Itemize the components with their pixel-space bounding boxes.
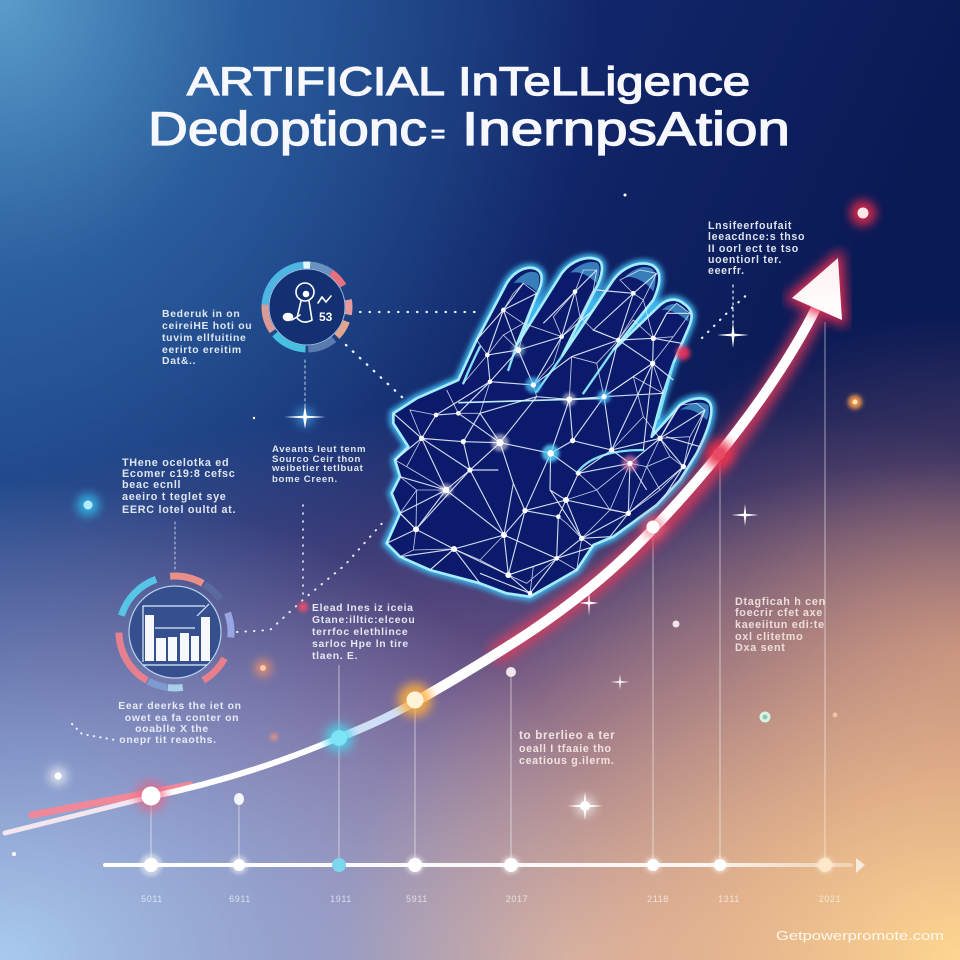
text block G: Dxa sent	[735, 642, 786, 654]
text block D: terrfoc elethlince	[312, 627, 408, 638]
text block H: to brerlieo a ter	[519, 729, 615, 742]
axis year labels	[141, 894, 841, 904]
text block G: foecrir cfet axe	[735, 607, 823, 619]
curve left tail white	[5, 797, 150, 833]
text block A: tuvim ellfuitine	[162, 333, 247, 344]
chart frame	[143, 604, 209, 665]
ring number: 53	[319, 310, 333, 324]
chart bars	[145, 615, 210, 661]
icon: bar chart ring	[98, 555, 252, 709]
text block B: Ecomer c19:8 cefsc	[122, 468, 235, 480]
text block H: oeall I tfaaie tho	[519, 743, 612, 755]
title line 1: ARTIFICIAL	[187, 60, 445, 104]
text block A: Bederuk in on	[162, 309, 240, 320]
axis line	[103, 863, 853, 867]
text block A: ceireiHE hoti ou	[162, 321, 252, 332]
title line 2: Dedoptionc	[148, 102, 427, 155]
growth curve with arrow	[5, 258, 842, 833]
axis year labels: 1911	[330, 894, 352, 904]
text block F	[708, 220, 805, 277]
title line 2: InernpsAtion	[462, 102, 790, 155]
node pink	[136, 781, 166, 811]
dotted connectors	[72, 285, 750, 740]
dense finger mesh	[395, 270, 705, 593]
axis year labels: 2118	[647, 894, 669, 904]
node red	[705, 440, 733, 468]
text block B: aeeiro t teglet sye	[122, 491, 227, 503]
hand glow	[387, 258, 711, 597]
text block B	[122, 457, 236, 516]
text block F: uoentiorl ter.	[708, 254, 782, 266]
text block C: bome Creen.	[272, 474, 338, 485]
text block C: Sourco Ceir thon	[272, 454, 361, 465]
curve lower section	[150, 738, 338, 797]
text block B: EERC lotel oultd at.	[122, 504, 236, 516]
curve red glow	[500, 318, 812, 652]
node amber	[398, 683, 432, 717]
text block G: Dtagficah h cen	[735, 596, 826, 608]
axis year labels: 6911	[229, 894, 251, 904]
text block E: onepr tit reaoths.	[119, 735, 217, 746]
curve middle section	[338, 702, 415, 738]
icon: person ring	[248, 248, 366, 366]
axis year labels: 2021	[819, 894, 841, 904]
hand fill	[387, 258, 711, 597]
text block B: THene ocelotka ed	[122, 457, 229, 469]
wireframe mesh	[387, 270, 705, 593]
stem cap 2	[234, 793, 244, 805]
text block A: Dat&..	[162, 356, 196, 367]
title line 2	[148, 102, 790, 155]
arrow head glow	[792, 258, 842, 320]
text block D: Gtane:illtic:elceou	[312, 615, 415, 626]
arrow head	[792, 258, 842, 320]
axis year labels: 2017	[506, 894, 528, 904]
curve upper section	[415, 310, 815, 702]
axis year labels: 5011	[141, 894, 163, 904]
text block C: Aveants leut tenm	[272, 444, 366, 455]
text block G: kaeeiitun edi:te	[735, 619, 825, 631]
text block B: beac ecnll	[122, 479, 181, 491]
node cyan	[325, 724, 353, 752]
curve left tail red	[32, 785, 190, 815]
title line 2: =	[431, 121, 445, 148]
axis year labels: 1311	[718, 894, 740, 904]
text block F: eeerfr.	[708, 265, 745, 277]
node white stem top	[642, 516, 664, 538]
person glyph	[284, 283, 331, 322]
text block D: sarloc Hpe ln tire	[312, 639, 409, 650]
stem cap 5	[506, 667, 516, 677]
neural network hand	[387, 258, 711, 597]
timeline axis	[103, 854, 865, 904]
inner finger edges	[463, 345, 673, 473]
title line 1: InTeLLigence	[458, 60, 750, 104]
text block G	[735, 596, 826, 654]
text block C	[271, 444, 366, 485]
text block E: ooablle X the	[135, 724, 209, 735]
text block A: eerirto ereitim	[162, 345, 242, 356]
text block H: ceatious g.ilerm.	[519, 755, 615, 767]
glowing curve nodes	[136, 440, 733, 811]
finger tips	[513, 262, 709, 420]
text block D: Elead Ines iz iceia	[312, 603, 414, 614]
text block G: oxl clitetmo	[735, 631, 803, 643]
axis arrowhead	[856, 858, 865, 873]
text block E: Eear deerks the iet on	[118, 701, 242, 712]
axis year labels: 5911	[406, 894, 428, 904]
text block D: tlaen. E.	[312, 651, 358, 662]
text block H	[519, 729, 615, 767]
watermark: Getpowerpromote.com	[776, 928, 944, 943]
text block D	[312, 603, 415, 662]
title line 1	[187, 60, 750, 104]
text block F: II oorl ect te tso	[708, 243, 799, 255]
title	[148, 60, 790, 155]
text block A	[162, 309, 252, 367]
text block F: Lnsifeerfoufait	[708, 220, 792, 232]
text block E: owet ea fa conter on	[125, 713, 239, 724]
timeline vertical stems	[151, 322, 825, 865]
text block F: leeacdnce:s thso	[708, 231, 805, 243]
axis markers	[140, 854, 833, 876]
decorative glowing dots	[12, 194, 876, 856]
sparkle stars	[284, 322, 759, 820]
text block C: weibetier tetlbuat	[271, 463, 364, 474]
text block E	[118, 701, 242, 746]
palm top bright line	[458, 398, 607, 403]
mesh nodes	[413, 289, 686, 596]
